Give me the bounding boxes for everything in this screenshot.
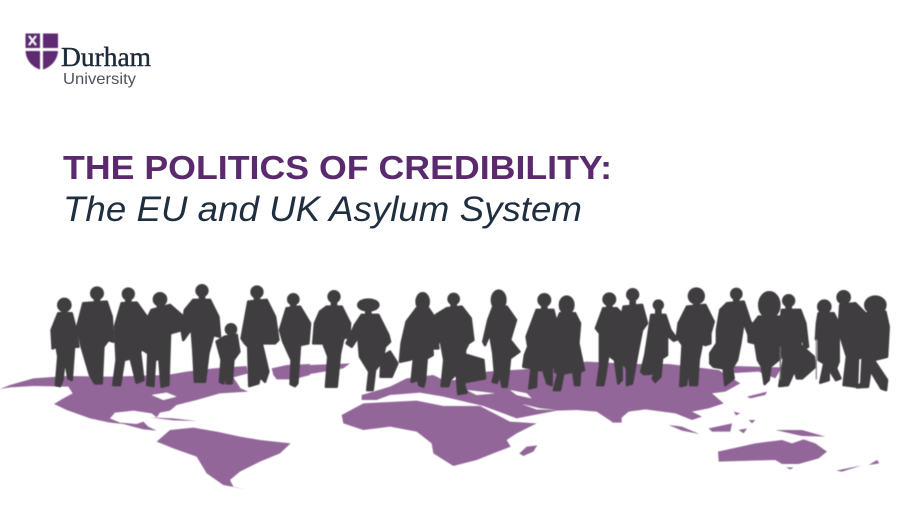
Australia (718, 439, 827, 464)
map: Africa and Europe (310, 362, 622, 466)
person: older woman (523, 294, 557, 388)
Borneo (709, 423, 732, 432)
Africa (342, 401, 537, 466)
person: woman walking (857, 297, 889, 390)
person: woman in hat with bag (347, 300, 397, 390)
Iceland and Greenland edge (310, 363, 350, 374)
New Guinea (775, 430, 825, 437)
person: man walking (242, 287, 278, 386)
person: man with cane and bag (779, 295, 815, 386)
Great Lakes (152, 393, 177, 400)
person: child (217, 324, 239, 383)
Persian Gulf (522, 404, 557, 410)
person: woman with holdall (710, 289, 754, 385)
Tasmania (786, 467, 794, 469)
Asia east (612, 364, 740, 423)
logo wordmark: Durham (61, 42, 151, 72)
crowd of silhouettes (52, 285, 889, 394)
person: elderly woman with cane (816, 301, 840, 383)
logo subtext: University (63, 71, 136, 88)
Madagascar (519, 445, 537, 456)
New Zealand (836, 460, 879, 472)
Eurasia west (362, 362, 622, 423)
person: long-haired woman with handbag (483, 291, 519, 387)
person: woman with backpack (143, 293, 183, 387)
person: woman with bag (641, 301, 677, 382)
person: man in coat (113, 289, 147, 385)
Cuba (150, 417, 197, 421)
map: Americas (0, 364, 310, 489)
people group right (620, 289, 889, 390)
logo: Durham University (26, 34, 151, 88)
person: long-haired woman (749, 292, 780, 384)
Greenland (272, 364, 310, 379)
person: man (313, 291, 350, 387)
person: girl (52, 299, 78, 386)
person: tall man (182, 285, 220, 382)
person: man (77, 288, 113, 383)
title: THE POLITICS OF CREDIBILITY: (63, 149, 612, 186)
person: man with bag (433, 294, 485, 394)
person: man in cap (838, 291, 865, 387)
Black Sea (510, 390, 532, 398)
people group left (52, 285, 310, 387)
person: woman (280, 294, 310, 386)
South America (157, 428, 291, 489)
people group centre (313, 291, 622, 394)
Japan (747, 392, 767, 398)
person: man in hat (620, 289, 647, 385)
person: long-haired woman (400, 293, 438, 387)
North America (0, 366, 248, 431)
person: woman in dress (554, 297, 584, 390)
Baltic gap (467, 390, 495, 395)
person: woman in jacket (677, 289, 714, 386)
world map (0, 362, 879, 489)
icon: shield (26, 34, 58, 70)
Sumatra (669, 425, 699, 434)
Siberia east (729, 366, 782, 378)
subtitle: The EU and UK Asylum System (63, 190, 582, 229)
map: Asia and Oceania (612, 364, 879, 472)
person: man (596, 294, 622, 385)
small islands (734, 412, 755, 433)
